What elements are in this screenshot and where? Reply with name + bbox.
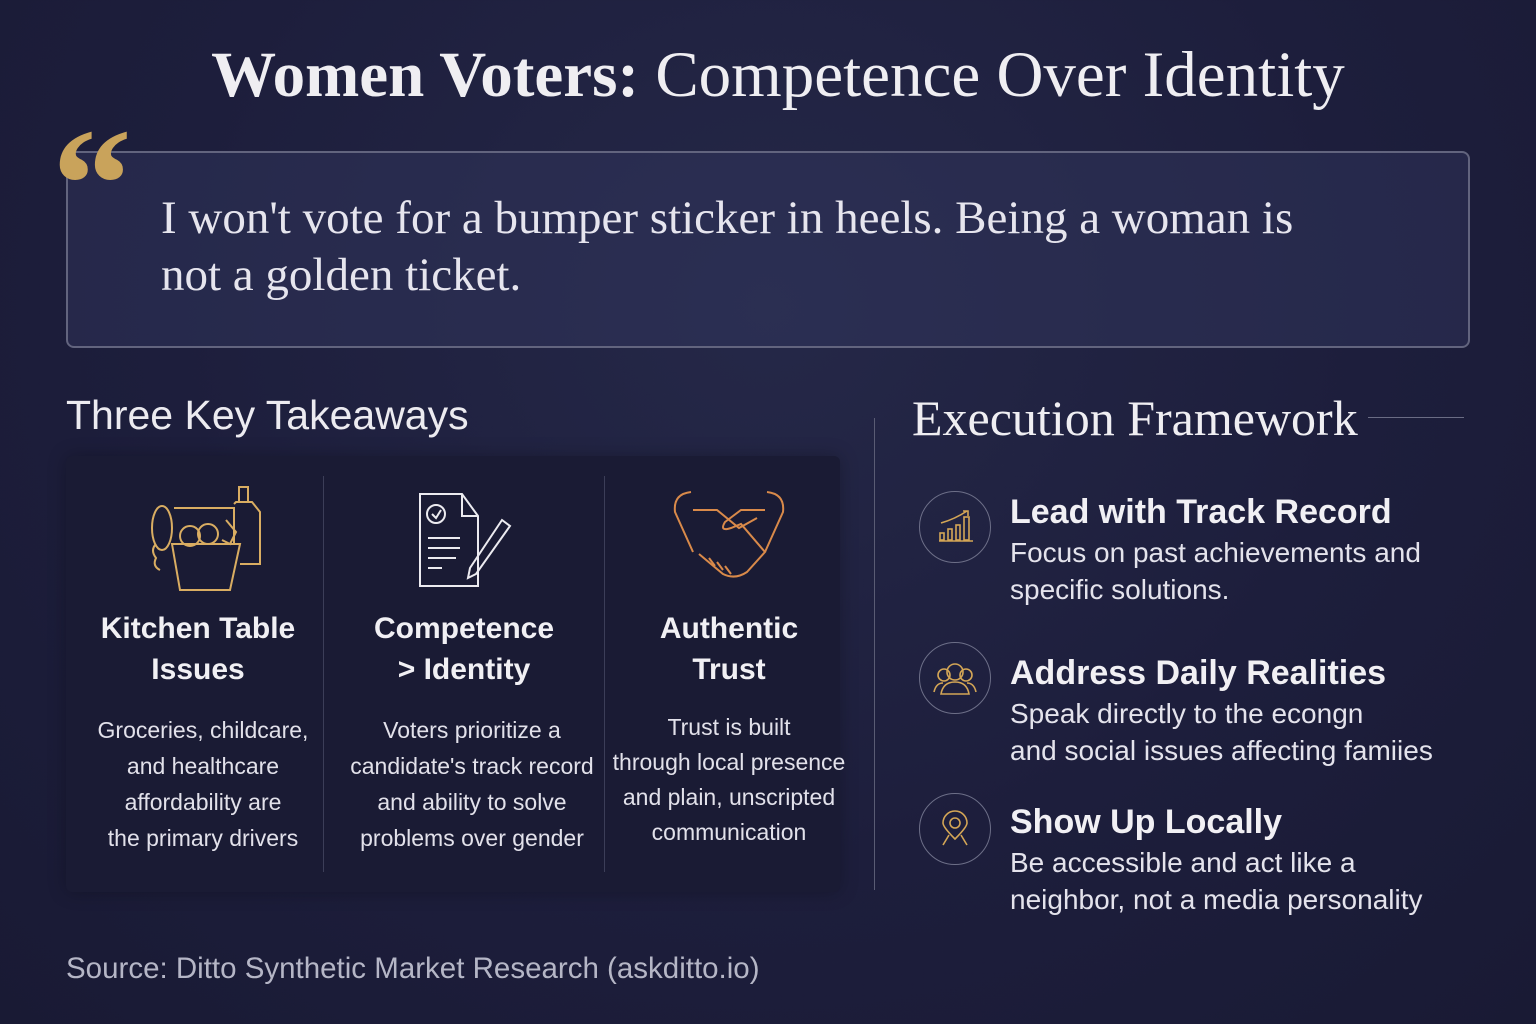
card: competence	[350, 493, 594, 851]
text: the primary drivers	[108, 825, 298, 851]
text: Voters prioritize a	[383, 717, 561, 743]
text: and plain, unscripted	[623, 784, 835, 810]
heading: takeaways: Three Key Takeaways	[66, 392, 469, 438]
card: authentic trust	[612, 491, 845, 845]
item: show up locally: Show Up Locally	[1010, 803, 1282, 841]
heading: Kitchen Table	[101, 612, 295, 645]
item: track record	[919, 491, 1421, 605]
icon: grocery basket	[151, 486, 261, 591]
icon: handshake	[674, 491, 784, 578]
text: Groceries, childcare,	[98, 717, 308, 743]
text	[612, 714, 845, 845]
text: problems over gender	[360, 825, 584, 851]
item: track record: specific solutions.	[1010, 574, 1229, 605]
quote text: I won't vote for a bumper sticker in heels. Being a woman is	[161, 192, 1293, 244]
quote text	[161, 192, 1293, 301]
icon: growth chart	[919, 491, 991, 563]
item: daily realities: Speak directly to the econgn	[1010, 698, 1363, 729]
icon: document with pencil	[419, 493, 512, 587]
heading: Authentic	[660, 612, 798, 645]
heading: execution framework: Execution Framework	[912, 390, 1358, 446]
panel: takeaways	[66, 456, 840, 892]
text	[350, 717, 594, 851]
icon: location pin	[919, 793, 991, 865]
text: through local presence	[613, 749, 845, 775]
icon: people group	[919, 642, 991, 714]
item: daily realities: Address Daily Realities	[1010, 654, 1386, 692]
item: show up locally: neighbor, not a media personality	[1010, 884, 1422, 915]
source note: Source: Ditto Synthetic Market Research (askditto.io)	[66, 952, 760, 985]
item: track record: Focus on past achievements and	[1010, 537, 1421, 568]
item: show up locally	[919, 793, 1422, 915]
item: daily realities: and social issues affecting famiies	[1010, 735, 1433, 766]
text: and healthcare	[127, 753, 279, 779]
card: kitchen table	[98, 486, 308, 851]
text	[98, 717, 308, 851]
heading	[101, 612, 295, 686]
heading: > Identity	[398, 653, 530, 686]
icon: quotation mark: “	[52, 95, 132, 273]
item: show up locally: Be accessible and act like a	[1010, 847, 1356, 878]
title: Women Voters: Competence Over Identity	[211, 39, 1345, 111]
text: Trust is built	[667, 714, 791, 740]
heading: Competence	[374, 612, 554, 645]
quote box	[66, 151, 1470, 348]
heading: Issues	[151, 653, 245, 686]
heading	[374, 612, 554, 686]
item: daily realities	[919, 642, 1433, 766]
text: communication	[652, 819, 806, 845]
text: candidate's track record	[350, 753, 594, 779]
text: and ability to solve	[377, 789, 567, 815]
item: track record: Lead with Track Record	[1010, 493, 1392, 531]
divider vertical	[874, 418, 875, 890]
heading: Trust	[692, 653, 766, 686]
quote text: not a golden ticket.	[161, 249, 521, 301]
text: affordability are	[125, 789, 281, 815]
heading	[660, 612, 798, 686]
